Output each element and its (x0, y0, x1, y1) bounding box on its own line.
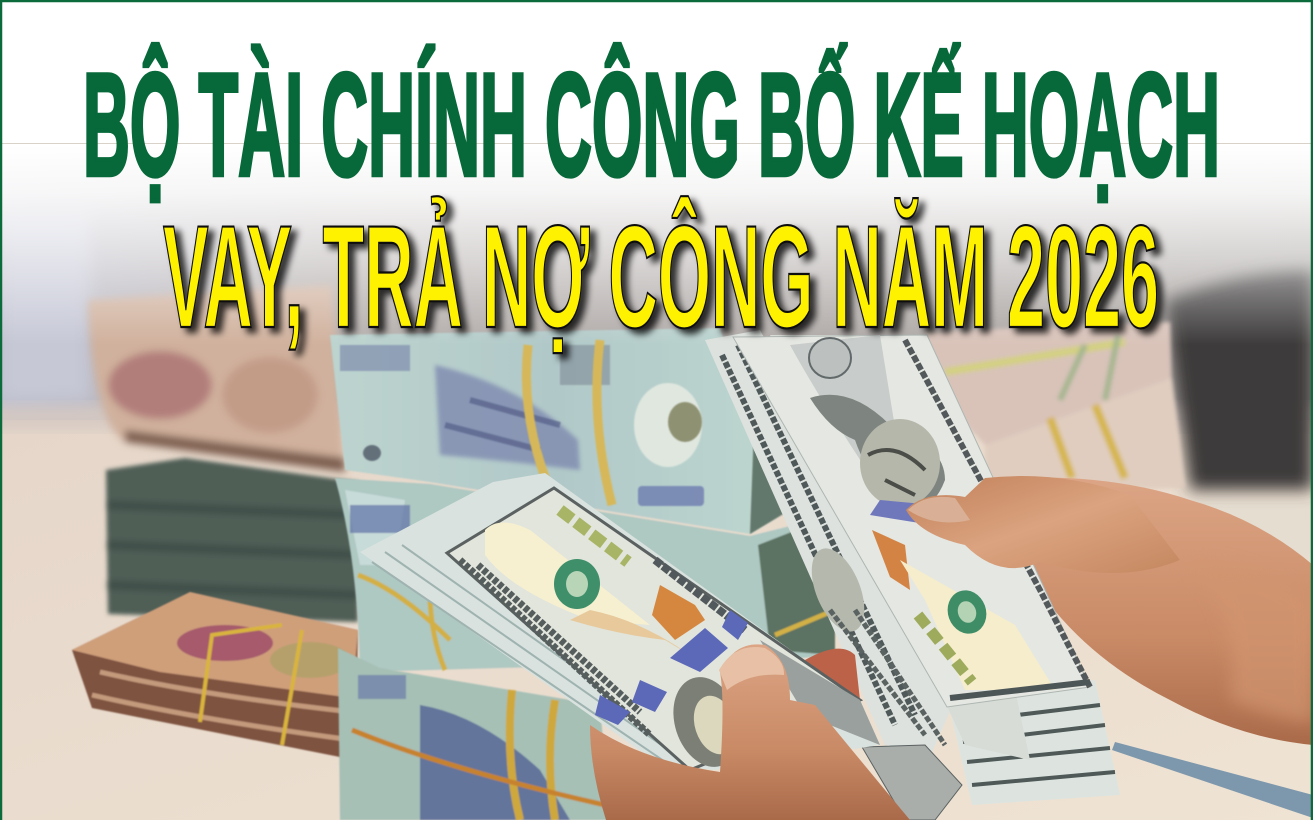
right thumbnail (908, 497, 970, 522)
top bill (733, 335, 1090, 707)
pile: middle stack behind dollars (335, 478, 835, 672)
palm crease shading (1180, 560, 1313, 722)
dollar bills right fan (705, 330, 1120, 805)
right hand thumb (906, 476, 1180, 573)
dark object right background (1165, 270, 1313, 490)
green 100 numerals (560, 510, 628, 562)
left hand finger behind bills (805, 649, 860, 720)
pile: pink banknotes left (88, 285, 345, 472)
right hand palm (985, 478, 1313, 745)
blue folder edge right (1112, 742, 1313, 818)
bill 2 (770, 335, 1030, 760)
back bill (705, 330, 955, 757)
left hand and thumb (590, 644, 910, 820)
lower bill edges (947, 680, 1120, 805)
pile: pink stacks right (925, 322, 1185, 492)
pile: bottom centre stack (338, 648, 610, 820)
security bands (460, 560, 650, 735)
dollar bills left fan (360, 473, 880, 776)
pile: dark green banknotes left (106, 458, 358, 622)
cream watermark area (485, 522, 650, 625)
white fade over photo top (0, 0, 1313, 345)
pile: 500000 dong centre stack (330, 328, 790, 534)
title (83, 43, 1220, 358)
left thumbnail (719, 647, 784, 690)
seal (554, 559, 600, 609)
top bill print (790, 335, 910, 520)
top bill (447, 488, 860, 770)
Franklin portrait (662, 668, 752, 776)
pile: pink banknotes bottom left (72, 592, 358, 760)
thin horizontal line (0, 143, 1313, 144)
extra bill corner under hand (862, 745, 962, 820)
orange patch (652, 585, 705, 640)
stack edges (360, 473, 880, 770)
